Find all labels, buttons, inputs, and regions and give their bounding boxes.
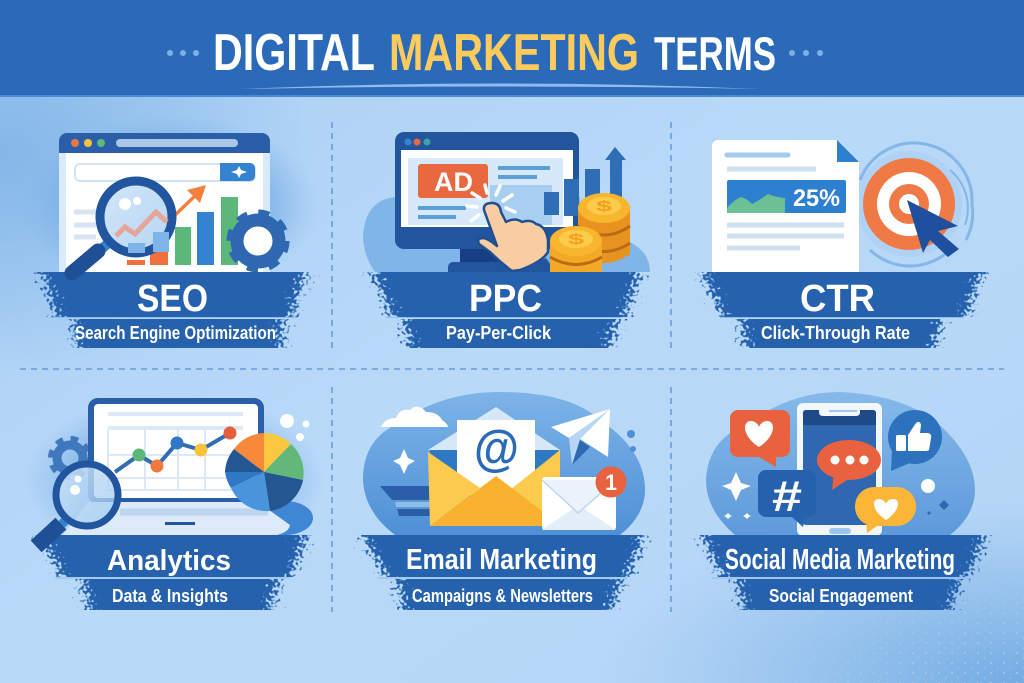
blob (363, 392, 645, 535)
icon: chat bubble (817, 440, 881, 490)
subtitle: Click-Through Rate (761, 323, 910, 343)
icon: hashtag bubble: # (772, 472, 802, 521)
banner (702, 272, 982, 348)
title dots (167, 50, 823, 56)
stat band: 25% (793, 185, 840, 212)
icon: laptop (63, 401, 313, 535)
icon: browser window (59, 133, 270, 272)
banner (42, 272, 306, 348)
icon: monitor (395, 132, 579, 272)
heading: CTR (800, 278, 875, 320)
panel: PPC (363, 132, 650, 348)
icon: magnifying glass (42, 464, 118, 541)
ad badge: AD (434, 167, 473, 197)
halo (20, 115, 320, 295)
icon: yellow heart bubble (855, 487, 916, 533)
icon: envelope (428, 407, 562, 526)
icon: small envelope (542, 477, 616, 530)
icon: magnifying glass (72, 181, 172, 273)
icon: coins (550, 193, 630, 272)
line chart (115, 426, 236, 472)
icon: gear (51, 439, 89, 477)
icon: hashtag bubble (758, 470, 816, 527)
icon: cloud (381, 406, 448, 427)
icon: phone (797, 403, 882, 536)
bubbles (280, 414, 310, 441)
icon: gear (230, 213, 286, 269)
icon: growth bars (585, 147, 626, 214)
title (213, 24, 776, 82)
panel: Social Media Marketing (702, 392, 986, 610)
heading: SEO (137, 278, 208, 320)
icon: document (712, 140, 859, 272)
stat band (727, 180, 846, 213)
notification badge (596, 466, 626, 498)
header band (0, 0, 1024, 97)
icon: cursor (907, 200, 959, 257)
subtitle: Social Engagement (769, 586, 913, 606)
banner (372, 272, 640, 348)
icon: heart bubble (730, 410, 790, 467)
bar chart (127, 185, 238, 265)
title: MARKETING (389, 24, 639, 82)
icon: thumbs up bubble (888, 410, 942, 471)
blob (706, 392, 975, 535)
panel: Analytics (25, 395, 325, 610)
pie chart (225, 433, 304, 511)
sparkles (722, 472, 949, 519)
title: TERMS (654, 27, 776, 80)
panel: Email Marketing (362, 392, 645, 610)
banner (362, 535, 644, 610)
banner (40, 535, 308, 610)
ad badge (418, 164, 488, 198)
icon: envelope: @ (474, 420, 519, 476)
icon: target (856, 143, 973, 266)
icon: coins: $ (568, 231, 585, 248)
heading: PPC (469, 278, 542, 320)
stripes (380, 486, 430, 516)
blob (363, 197, 650, 272)
halo (25, 395, 325, 565)
icon: coins: $ (596, 198, 613, 215)
icon: paper plane (551, 409, 610, 465)
sparkle (393, 449, 415, 474)
subtitle: Pay-Per-Click (446, 323, 552, 343)
banner (702, 535, 986, 610)
notification badge: 1 (605, 470, 617, 495)
heading: Email Marketing (406, 544, 597, 576)
icon: pointing hand (467, 185, 556, 272)
dots (627, 430, 636, 452)
title: DIGITAL (213, 24, 375, 82)
subtitle: Campaigns & Newsletters (412, 586, 593, 606)
heading: Analytics (107, 545, 231, 577)
title underline (239, 84, 760, 89)
panel: SEO (20, 115, 320, 348)
subtitle: Data & Insights (112, 586, 228, 606)
subtitle: Search Engine Optimization (75, 323, 276, 343)
panel: CTR (702, 140, 982, 348)
